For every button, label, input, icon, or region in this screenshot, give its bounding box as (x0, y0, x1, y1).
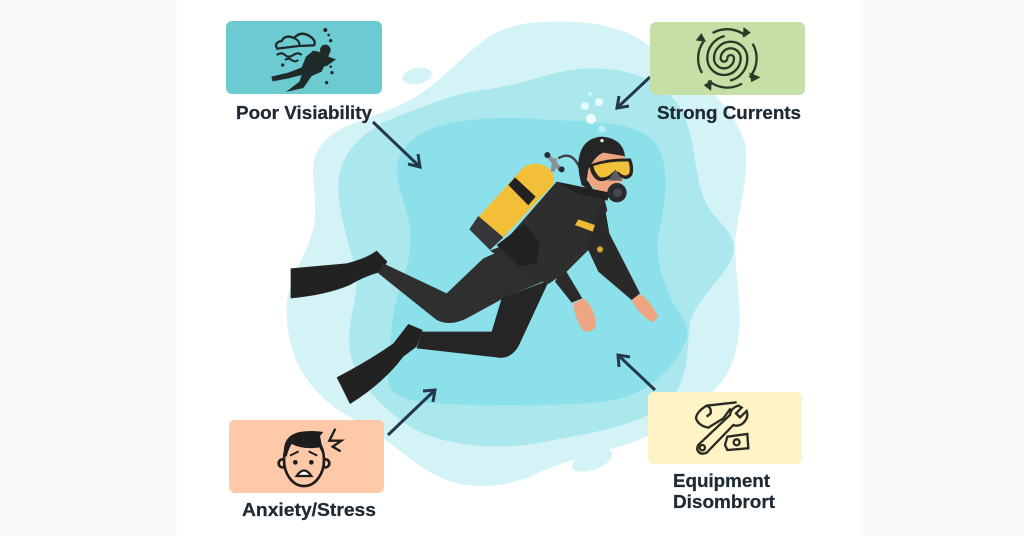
panel: strong currents (650, 22, 805, 123)
label: Disombrort (673, 492, 775, 512)
bubbles (581, 92, 606, 132)
card (650, 22, 805, 95)
icon: stressed face (279, 429, 341, 486)
panel: anxiety and stress (229, 420, 384, 520)
arrow: anxiety (388, 390, 435, 435)
small water blob bottom (569, 443, 615, 477)
back leg (378, 247, 547, 323)
front fin (337, 324, 423, 404)
label: Anxiety/Stress (242, 500, 376, 520)
card (229, 420, 384, 493)
near hand (632, 293, 658, 322)
front leg (417, 280, 549, 358)
far hand (573, 298, 596, 332)
tank body (478, 164, 554, 237)
arrow: strong currents (617, 77, 650, 108)
arrow: poor visibility (373, 122, 420, 167)
near arm (587, 198, 640, 300)
label: Poor Visiability (236, 103, 372, 123)
panel: equipment discomfort (648, 392, 802, 512)
water background blobs (287, 21, 746, 486)
back fin (291, 251, 387, 298)
icon: wrench and gear (696, 402, 748, 454)
torso (490, 182, 607, 284)
regulator (607, 183, 627, 202)
backpack strap (497, 223, 540, 267)
label: Equipment (673, 471, 770, 491)
label: Strong Currents (657, 103, 801, 123)
far arm (555, 267, 582, 303)
arrow: equipment (618, 355, 655, 390)
card (226, 21, 382, 94)
hood (578, 137, 625, 195)
dive mask (589, 158, 633, 181)
chest badge (575, 219, 595, 232)
valve and hose (544, 152, 583, 177)
scuba diver illustration (291, 137, 658, 404)
small water blob top (401, 65, 433, 87)
shoulder dot (597, 246, 603, 252)
neck collar (557, 182, 610, 201)
icon: swirl (697, 28, 759, 90)
icon: diver in cloudy water (271, 28, 336, 92)
label (673, 471, 775, 512)
face (587, 153, 624, 193)
tank base (469, 216, 503, 250)
card (648, 392, 802, 464)
panel: poor visibility (226, 21, 382, 123)
tank band (508, 177, 536, 205)
